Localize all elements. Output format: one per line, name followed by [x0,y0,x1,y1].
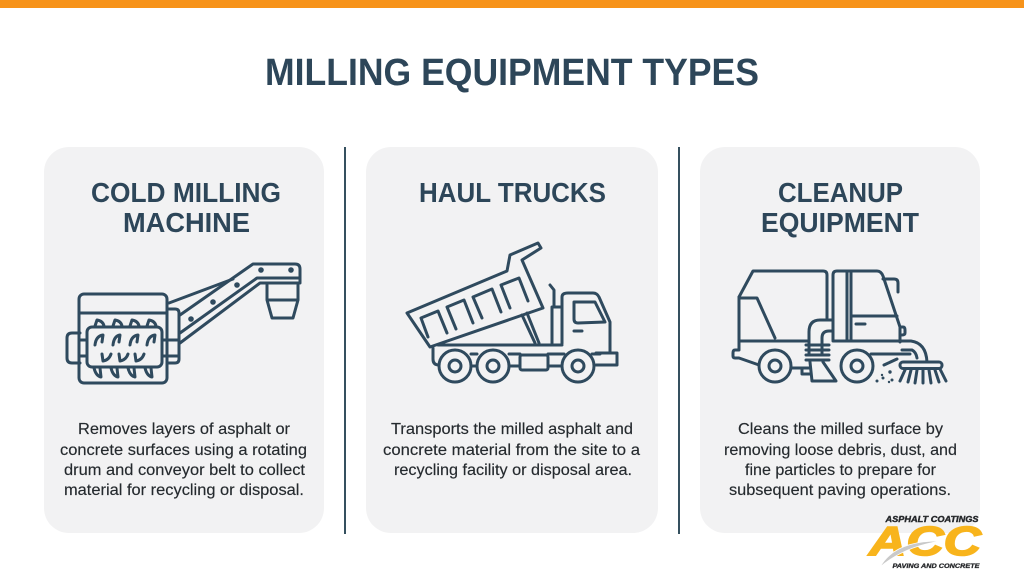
panel: cold milling machine [44,147,324,533]
heading: HAUL TRUCKS [419,177,606,208]
icon: cold milling machine [67,264,300,383]
description [383,421,640,479]
description: drum and conveyor belt to collect [64,462,306,479]
description: concrete material from the site to a [383,442,640,459]
description: material for recycling or disposal. [64,482,304,499]
description [724,421,957,499]
description: concrete surfaces using a rotating [60,442,307,459]
description: recycling facility or disposal area. [394,462,632,479]
description: fine particles to prepare for [745,462,936,479]
title: MILLING EQUIPMENT TYPES [265,52,759,94]
icon: dump truck [407,243,617,382]
description: subsequent paving operations. [729,482,951,499]
logo: ACC asphalt coatings: PAVING AND CONCRETE [892,563,980,570]
heading [761,177,919,238]
top orange bar [0,0,1024,8]
description: Removes layers of asphalt or [78,421,290,438]
heading: CLEANUP [778,177,903,208]
logo: ACC asphalt coatings [868,514,983,570]
description [60,421,307,499]
heading [91,177,281,238]
panel: haul trucks [366,147,658,533]
card background [366,147,658,533]
description: Transports the milled asphalt and [391,421,633,438]
heading: COLD MILLING [91,177,281,208]
icon: street sweeper [733,271,946,383]
card background [700,147,980,533]
logo: ACC asphalt coatings: ASPHALT COATINGS [884,514,979,524]
heading: EQUIPMENT [761,207,919,238]
card background [44,147,324,533]
heading: MACHINE [123,207,250,238]
logo: ACC asphalt coatings: ACC [868,518,983,564]
panel: cleanup equipment [700,147,980,533]
description: Cleans the milled surface by [738,421,943,438]
description: removing loose debris, dust, and [724,442,957,459]
